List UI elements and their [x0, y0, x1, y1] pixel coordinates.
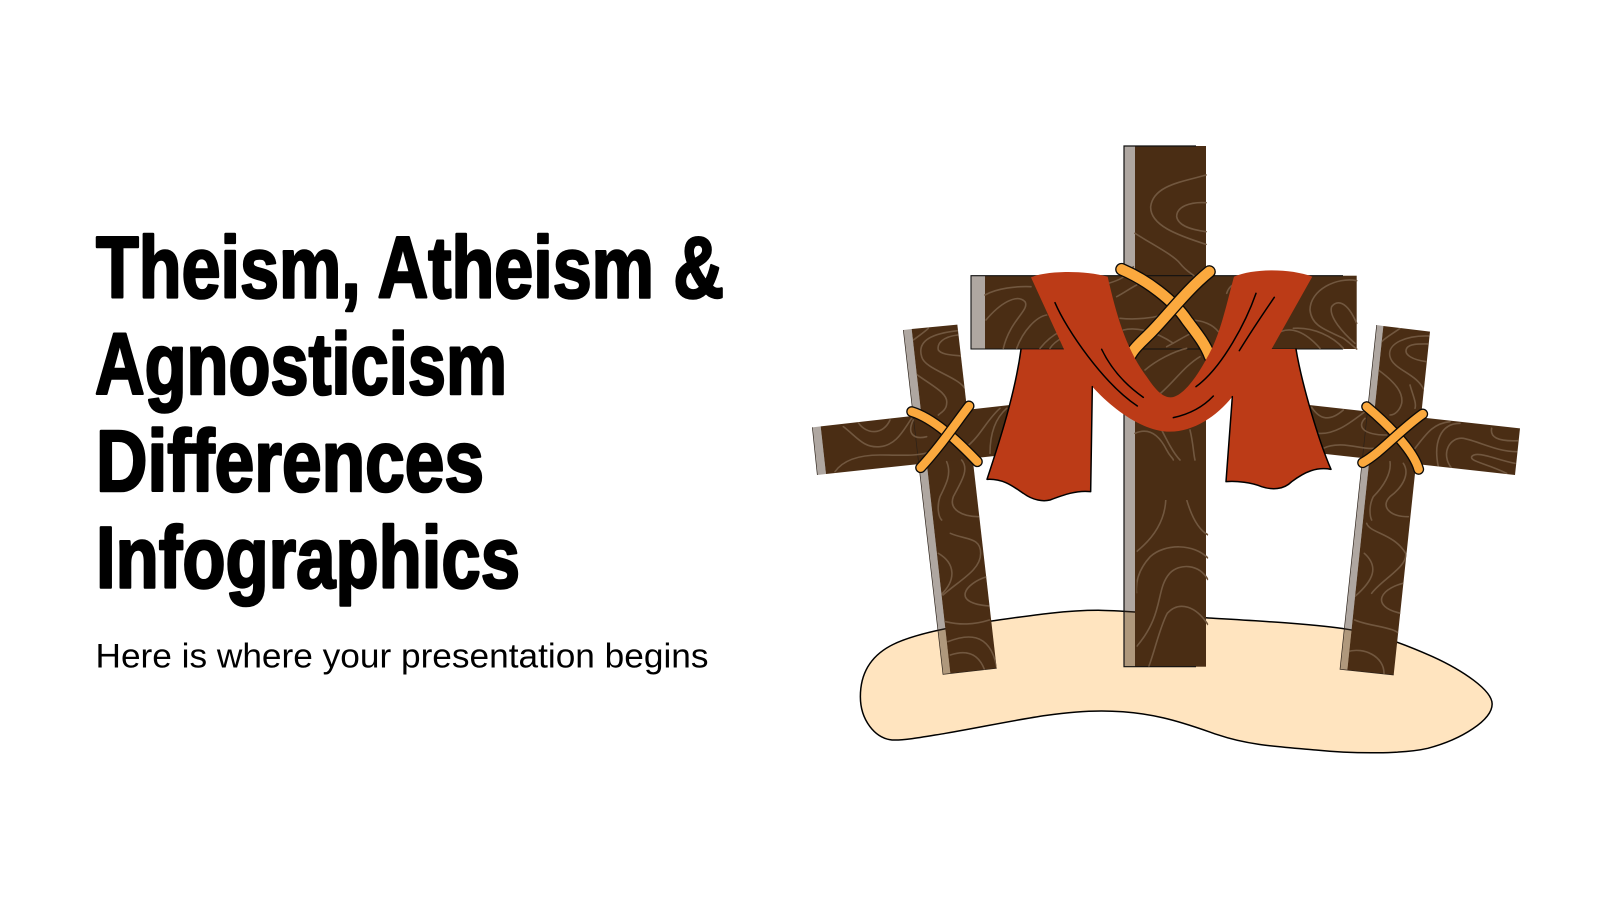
title: Infographics: [96, 509, 520, 606]
red cloth draped on center cross: [987, 270, 1331, 501]
title: [95, 219, 724, 606]
title: Differences: [96, 413, 484, 510]
title: Theism, Atheism &: [96, 219, 724, 316]
title: Agnosticism: [95, 316, 507, 413]
illustration: three crosses on a hill: [812, 146, 1520, 753]
right cross: [1300, 325, 1520, 675]
rope: center cross: [1122, 269, 1210, 360]
rope: left cross: [912, 406, 977, 468]
center cross: [971, 146, 1357, 667]
rope: right cross: [1363, 407, 1423, 469]
subtitle: Here is where your presentation begins: [96, 638, 708, 676]
left cross: [812, 325, 1020, 674]
ground mound: [860, 610, 1492, 753]
